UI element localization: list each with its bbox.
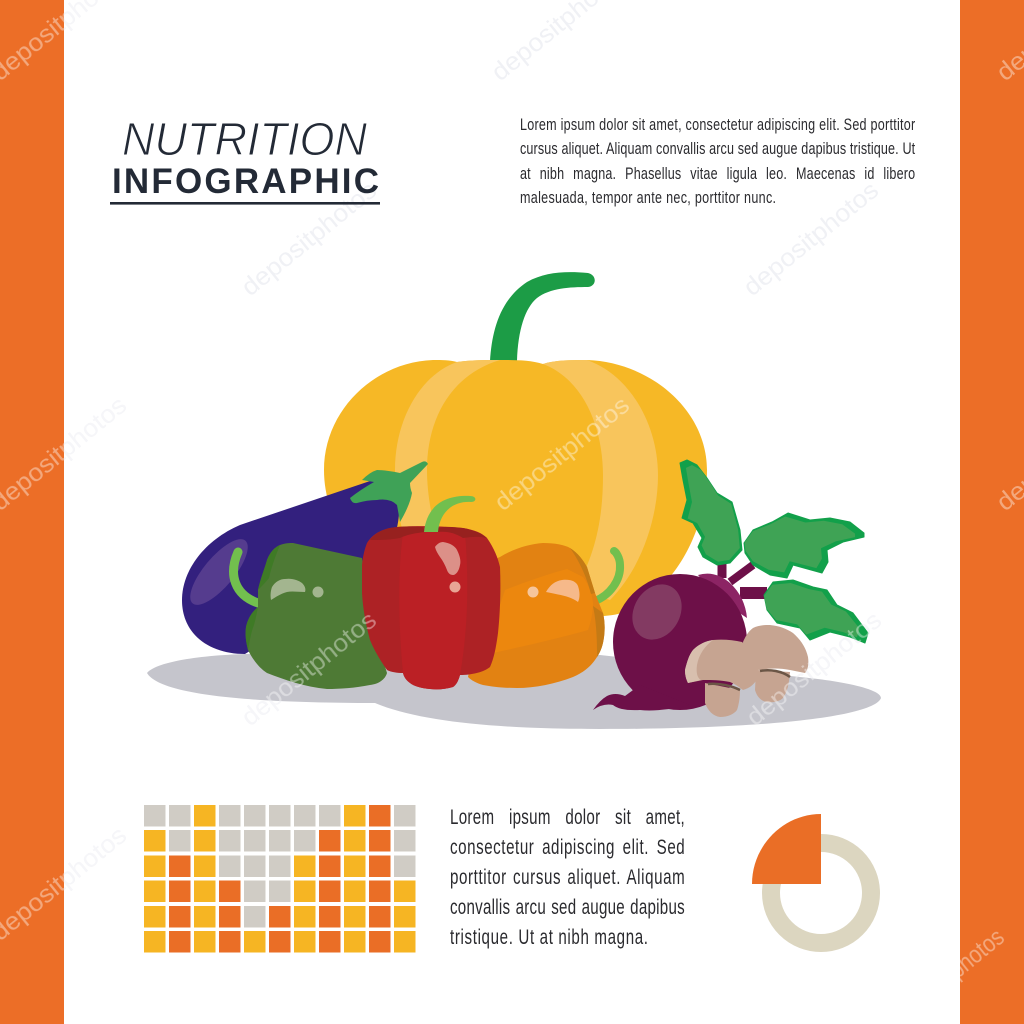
text block: lower paragraph: convallis arcu sed augue dapibus bbox=[450, 894, 685, 919]
text block: intro paragraph: cursus aliquet. Aliquam convallis arcu sed augue dapibus tristique. Ut bbox=[520, 139, 916, 159]
panel: right orange bar bbox=[960, 0, 1024, 1024]
text block: intro paragraph: Lorem ipsum dolor sit amet, consectetur adipiscing elit. Sed porttitor bbox=[520, 115, 915, 135]
text block: lower paragraph bbox=[450, 804, 685, 949]
title: INFOGRAPHIC bbox=[112, 162, 379, 201]
text block: lower paragraph: tristique. Ut at nibh magna. bbox=[450, 924, 648, 949]
text block: lower paragraph: porttitor cursus aliquet. Aliquam bbox=[450, 864, 685, 889]
title bbox=[110, 113, 380, 205]
chart: waffle bar grid bbox=[144, 805, 416, 952]
panel: left orange bar bbox=[0, 0, 64, 1024]
text block: lower paragraph: consectetur adipiscing elit. Sed bbox=[450, 834, 685, 859]
text block: lower paragraph: Lorem ipsum dolor sit amet, bbox=[450, 804, 685, 829]
watermark on white background: depositphotos bbox=[236, 176, 382, 302]
text block: intro paragraph bbox=[520, 115, 916, 208]
illustration: eggplant bbox=[181, 461, 428, 654]
illustration: pumpkin bbox=[324, 272, 707, 617]
illustration: beet with leaves bbox=[593, 460, 868, 710]
watermark on white background: depositphotos bbox=[236, 606, 382, 732]
watermark on white background: depositphotos bbox=[741, 606, 887, 732]
watermark over artwork: depositphotos bbox=[236, 606, 382, 732]
watermark over artwork: depositphotos bbox=[741, 606, 887, 732]
illustration: green pepper bbox=[234, 543, 387, 689]
chart: donut with quarter sector bbox=[752, 814, 871, 943]
illustration: red pepper bbox=[362, 496, 500, 689]
watermark on white background: depositphotos bbox=[738, 176, 884, 302]
watermark over artwork: depositphotos bbox=[489, 391, 635, 517]
illustration: mushrooms bbox=[685, 625, 808, 717]
ground shadow bbox=[147, 654, 881, 729]
text block: intro paragraph: at nibh magna. Phasellus vitae ligula leo. Maecenas id libero bbox=[520, 164, 915, 184]
illustration: orange pepper bbox=[468, 543, 620, 688]
text block: intro paragraph: malesuada, tempor ante nec, porttitor nunc. bbox=[520, 188, 776, 208]
title: NUTRITION bbox=[122, 113, 368, 165]
